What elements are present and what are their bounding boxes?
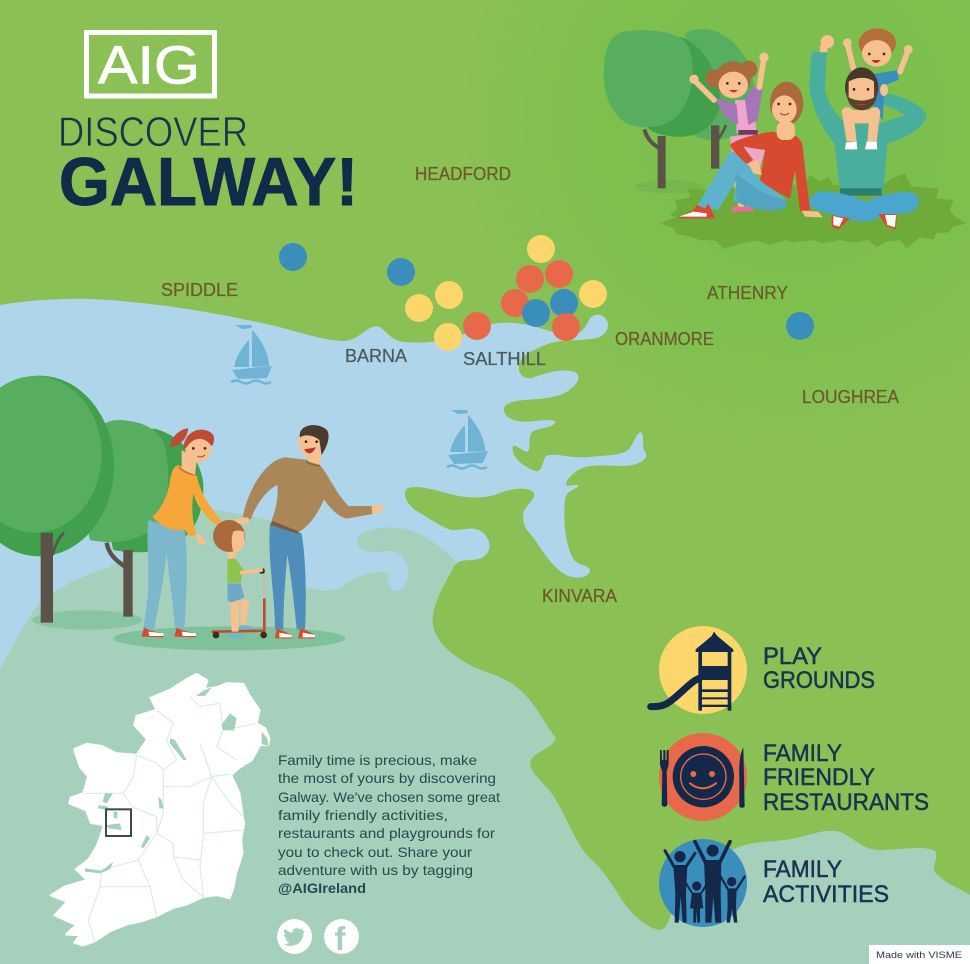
title: AIG logo	[86, 32, 214, 96]
map place labels: BARNA	[345, 346, 407, 366]
label: playgrounds: PLAY	[763, 643, 822, 670]
label: restaurants: FRIENDLY	[763, 764, 875, 791]
text block: introduction	[278, 753, 500, 896]
label: playgrounds	[763, 643, 875, 694]
text block: introduction: restaurants and playgrounds for	[278, 826, 496, 841]
legend: family activities	[659, 839, 889, 927]
mother	[697, 152, 787, 211]
text block: introduction: Family time is precious, make	[278, 753, 477, 768]
icon: sailboat left	[231, 325, 272, 384]
father's head	[852, 110, 872, 123]
text block: introduction: adventure with us by tagging	[278, 863, 473, 878]
map markers: playgrounds, restaurants, activities	[279, 235, 814, 351]
label: activities: ACTIVITIES	[763, 881, 889, 908]
man	[269, 523, 306, 629]
label: activities	[763, 856, 889, 908]
boy on scooter	[261, 575, 268, 598]
icon: facebook: f	[334, 920, 346, 957]
text block: introduction: Galway. We've chosen some great	[278, 790, 500, 805]
map place labels: ORANMORE	[615, 329, 714, 349]
boy's legs	[842, 107, 857, 142]
text block: introduction: the most of yours by discovering	[278, 771, 496, 786]
map place labels	[161, 164, 899, 606]
badge: made with VISME	[869, 945, 970, 964]
icon: plate with smiley	[659, 733, 747, 821]
father	[809, 52, 927, 192]
icon: playground slide	[651, 626, 747, 714]
illustration: family with scooter and trees	[0, 376, 387, 650]
label: playgrounds: GROUNDS	[763, 667, 875, 694]
map: mint shallows and land	[0, 510, 970, 964]
text block: introduction: @AIGIreland	[278, 881, 366, 896]
legend: family friendly restaurants	[659, 733, 929, 821]
text block: introduction: you to check out. Share your	[278, 845, 473, 860]
icon: twitter	[277, 919, 312, 954]
label: restaurants	[763, 740, 929, 816]
heading: GALWAY!: GALWAY!	[59, 144, 358, 220]
illustration: family sitting on the grass with trees	[604, 28, 967, 249]
map: Galway Bay water	[0, 299, 646, 720]
map place labels: SALTHILL	[463, 349, 546, 369]
legend: playgrounds	[651, 626, 875, 714]
map place labels: KINVARA	[542, 586, 617, 606]
map of Ireland with county lines	[51, 674, 269, 945]
map place labels: LOUGHREA	[802, 387, 899, 407]
boy on shoulders	[867, 70, 898, 120]
label: restaurants: FAMILY	[763, 740, 842, 767]
icon: family silhouette	[659, 839, 747, 927]
badge: made with VISME: Made with VISME	[876, 950, 962, 961]
label: activities: FAMILY	[763, 856, 842, 883]
text block: introduction: family friendly activities,	[278, 808, 448, 823]
icon: sailboat right	[447, 410, 488, 468]
map place labels: SPIDDLE	[161, 280, 238, 300]
icon: facebook	[324, 919, 359, 957]
title: AIG logo: AIG	[98, 36, 200, 96]
map place labels: ATHENRY	[707, 283, 788, 303]
label: restaurants: RESTAURANTS	[763, 789, 929, 816]
woman	[143, 520, 187, 629]
girl	[733, 180, 744, 207]
map place labels: HEADFORD	[415, 164, 511, 184]
heading: DISCOVER: DISCOVER	[58, 108, 248, 155]
